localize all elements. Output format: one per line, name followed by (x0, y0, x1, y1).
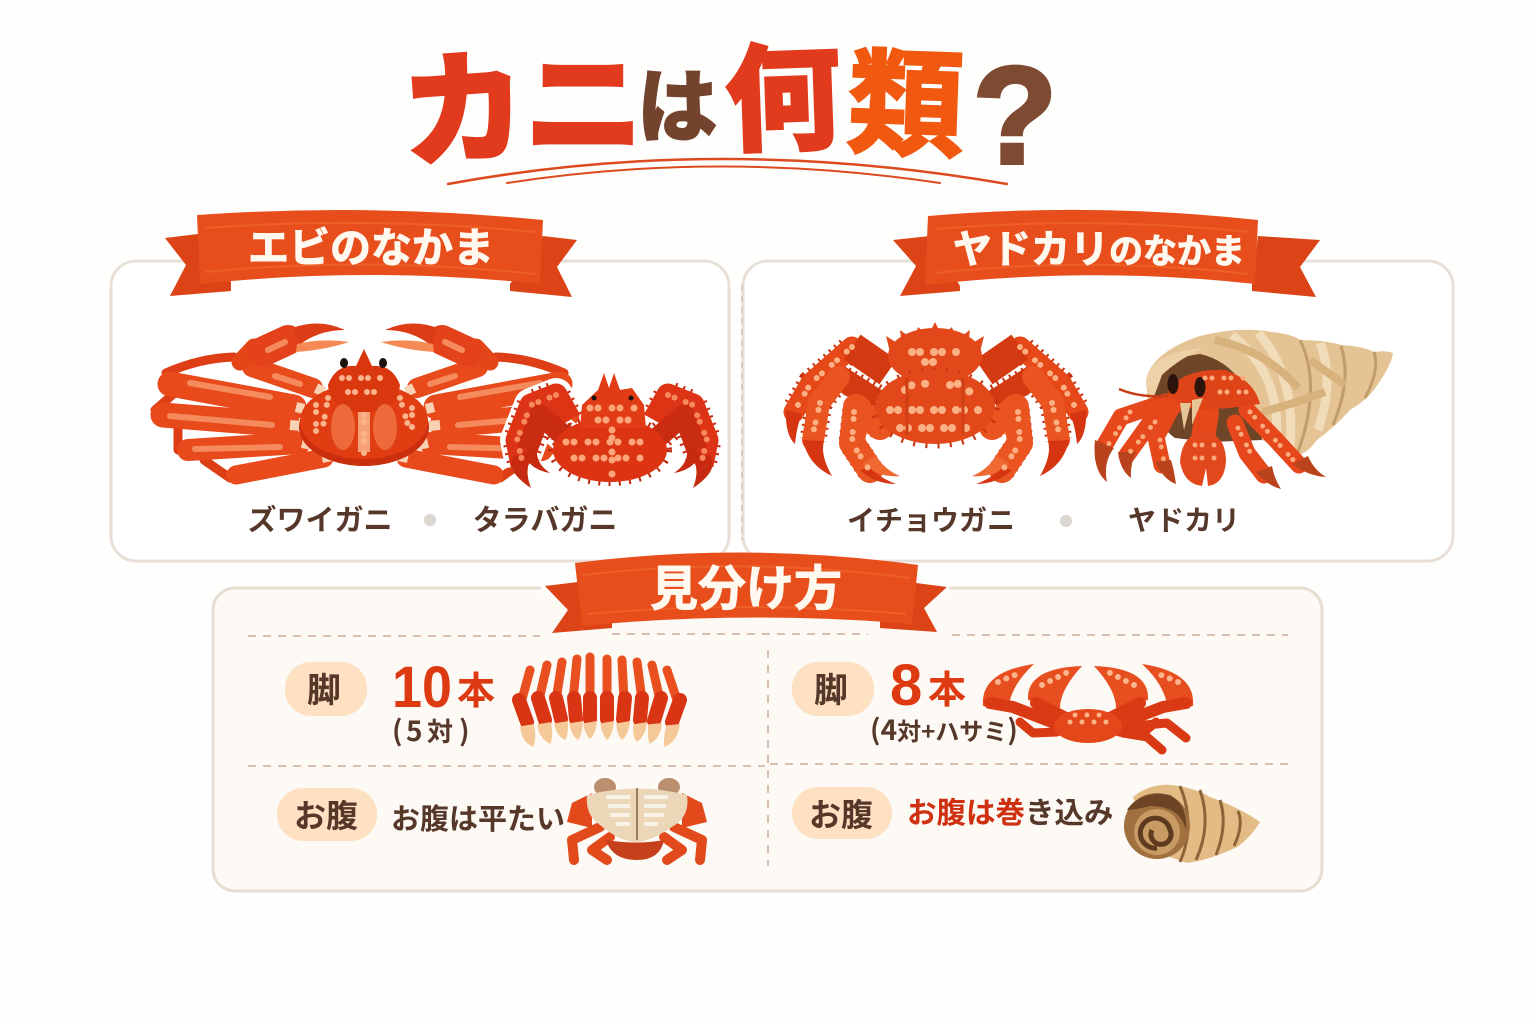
text: お腹は平たい: お腹は平たい (391, 796, 565, 838)
count: 10本 (5対): 本 (457, 660, 495, 715)
count: 8本 (4対+ハサミ): 8 (890, 653, 922, 718)
banner: ヤドカリのなかま: ヤドカリのなかま (953, 219, 1245, 275)
banner: ヤドカリのなかま (893, 210, 1320, 297)
title underline (448, 159, 1007, 184)
hermit crab body (1103, 402, 1299, 475)
separator dot (424, 514, 436, 526)
count: 10本 (5対): 10 (392, 655, 452, 720)
pill: お腹 left: お腹 (294, 791, 358, 837)
panel divider (741, 285, 743, 540)
pill: お腹 right: お腹 (809, 790, 873, 836)
text: お腹は巻き込み: お腹は巻き込み (907, 790, 1114, 832)
icon: タラバガニ (511, 373, 713, 488)
title: は (637, 43, 717, 159)
banner: エビのなかま: エビのなかま (248, 214, 494, 274)
aperture (1150, 354, 1262, 442)
pill: 脚 left (285, 662, 367, 716)
label: イチョウガニ: イチョウガニ (847, 499, 1015, 539)
count: 10本 (5対): ( (392, 710, 403, 750)
icon: spiral shell (1124, 785, 1260, 863)
icon: crab underside (567, 778, 707, 860)
icon: ヤドカリ (1094, 330, 1393, 489)
icon: 10 legs (519, 657, 680, 746)
title: ? (973, 39, 1057, 193)
icon: small crab with claws (983, 664, 1193, 750)
pill: お腹 left (277, 788, 377, 841)
count: 8本 (4対+ハサミ): 本 (928, 659, 966, 714)
count: 10本 (5対): ) (459, 710, 470, 750)
count: 10本 (5対): 5 (406, 710, 423, 750)
shell body (1146, 330, 1393, 455)
shell bands (1298, 340, 1376, 452)
count: 8本 (4対+ハサミ): (4対+ハサミ) (870, 709, 1018, 749)
banner: 見分け方 (545, 549, 947, 633)
pill: 脚 right: 脚 (814, 663, 848, 712)
title (396, 6, 1057, 193)
title: 類 (845, 10, 967, 182)
panel: 見分け方 (213, 588, 1322, 891)
panel: ヤドカリのなかま (743, 261, 1453, 561)
title: カ (396, 8, 530, 193)
label: タラバガニ: タラバガニ (473, 497, 617, 539)
count: 10本 (5対) (392, 655, 495, 750)
banner: エビのなかま (165, 210, 577, 297)
title: 何 (723, 6, 843, 175)
separator dot (1060, 515, 1072, 527)
title: ニ (526, 12, 642, 180)
panel: エビのなかま (111, 261, 729, 561)
panel top mask behind banner (541, 580, 949, 594)
label: ズワイガニ: ズワイガニ (247, 497, 393, 539)
pill: お腹 right (792, 787, 892, 839)
banner: 見分け方: 見分け方 (650, 549, 842, 619)
icon: イチョウガニ (786, 322, 1086, 484)
count: 10本 (5対): 対 (427, 712, 453, 749)
count: 8本 (4対+ハサミ) (870, 653, 1018, 749)
pill: 脚 right (792, 662, 874, 716)
label: ヤドカリ: ヤドカリ (1128, 499, 1240, 539)
icon: ズワイガニ (155, 323, 575, 478)
pill: 脚 left: 脚 (307, 663, 341, 712)
